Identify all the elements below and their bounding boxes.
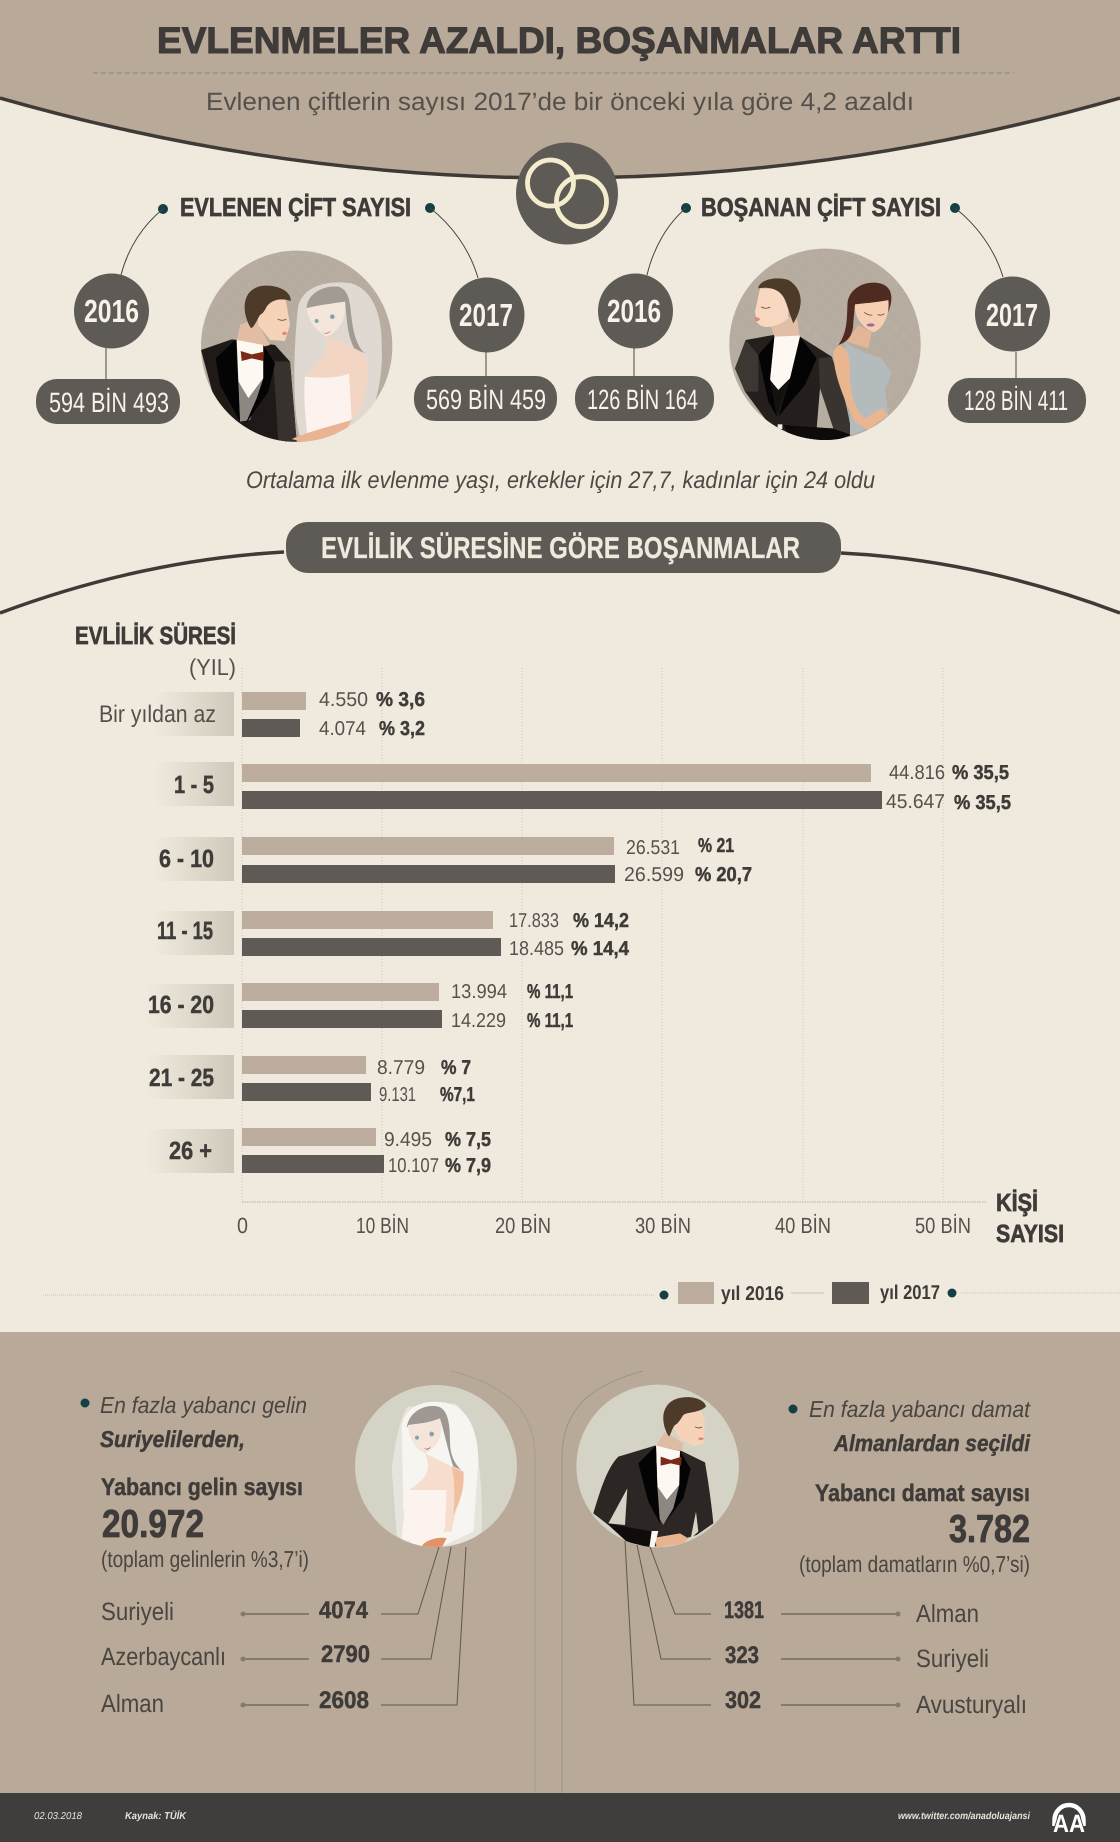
block: foreign brides text: 20.972 — [102, 1503, 204, 1546]
list: foreign brides by nationality — [101, 1547, 466, 1718]
row: 16-20: % 11,1 — [527, 981, 573, 1003]
block: foreign grooms text: En fazla yabancı damat — [809, 1396, 1031, 1422]
value: 569 bin 459 — [414, 376, 557, 421]
icon: wedding rings — [516, 142, 618, 244]
row: 1-5: % 35,5 — [952, 762, 1009, 784]
footer — [0, 1793, 1120, 1842]
value: 126 bin 164: 126 BİN 164 — [587, 384, 698, 415]
value: 569 bin 459: 569 BİN 459 — [426, 384, 546, 415]
illustration: foreign groom — [576, 1385, 739, 1548]
row: 6-10: % 20,7 — [695, 864, 752, 886]
row: 26+: % 7,5 — [445, 1129, 491, 1151]
row: under one year: Bir yıldan az — [99, 701, 216, 728]
row: 1-5: 1 - 5 — [174, 771, 214, 799]
value: 126 bin 164 — [575, 376, 714, 421]
block: foreign brides text: En fazla yabancı gelin — [100, 1392, 307, 1418]
subtitle: Evlenen çiftlerin sayısı 2017’de bir önceki yıla göre 4,2 azaldı — [206, 88, 914, 116]
row: 26+ — [146, 1128, 491, 1177]
block: foreign grooms text: (toplam damatların %0,7’si) — [799, 1551, 1030, 1577]
x axis labels — [237, 1213, 971, 1238]
badge: 2016 — [598, 274, 673, 348]
row: 6-10: % 21 — [698, 835, 734, 857]
badge: 2017 — [450, 278, 524, 352]
legend: yıl 2017 — [880, 1282, 940, 1304]
x axis labels: 50 BİN — [915, 1213, 971, 1238]
illustration: separated couple — [729, 249, 921, 443]
row: 16-20 — [146, 981, 573, 1032]
list: foreign brides by nationality: 2608 — [319, 1687, 369, 1714]
row: 21-25 — [146, 1055, 475, 1106]
row: under one year: 4.550 — [319, 689, 368, 711]
section heading pill: EVLİLİK SÜRESİNE GÖRE BOŞANMALAR — [321, 532, 800, 565]
x axis title — [996, 1189, 1064, 1248]
row: 11-15: % 14,2 — [573, 910, 629, 932]
section arc — [0, 552, 1120, 613]
row: under one year — [99, 689, 425, 740]
row: 1-5: 45.647 — [886, 791, 945, 813]
panel: foreign spouses — [0, 1332, 1120, 1793]
block: foreign grooms text: Almanlardan seçildi — [833, 1430, 1031, 1456]
row: 26+: 9.495 — [384, 1129, 432, 1151]
badge: 2017: 2017 — [459, 297, 513, 333]
row: under one year: % 3,6 — [376, 689, 425, 711]
axis title: marriage duration — [75, 622, 236, 680]
header curve — [0, 98, 1120, 178]
title: EVLENMELER AZALDI, BOŞANMALAR ARTTI — [157, 20, 961, 61]
value: 128 bin 411: 128 BİN 411 — [964, 385, 1068, 416]
list: foreign grooms by nationality: 323 — [725, 1642, 759, 1669]
row: 11-15: 17.833 — [509, 910, 559, 932]
badge: 2016: 2016 — [84, 293, 139, 329]
list: foreign brides by nationality: Alman — [101, 1690, 164, 1718]
panel: divorces — [575, 192, 1086, 423]
row: 21-25: % 7 — [441, 1057, 471, 1079]
block: foreign brides text: Yabancı gelin sayısı — [101, 1474, 303, 1501]
row: 6-10: 26.599 — [624, 864, 684, 886]
value: 594 bin 493: 594 BİN 493 — [49, 387, 169, 418]
row: 1-5 — [154, 762, 1011, 814]
row: 6-10 — [154, 835, 752, 886]
bar chart — [75, 622, 1064, 1248]
row: 21-25: 8.779 — [377, 1057, 425, 1079]
axis title: marriage duration: EVLİLİK SÜRESİ — [75, 622, 236, 650]
value: 128 bin 411 — [948, 378, 1086, 423]
row: 16-20: % 11,1 — [527, 1010, 573, 1032]
block: foreign brides text — [80, 1392, 309, 1572]
block: foreign grooms text — [788, 1396, 1031, 1577]
list: foreign grooms by nationality: Alman — [916, 1600, 979, 1628]
row: under one year: % 3,2 — [379, 718, 425, 740]
badge: 2017 — [975, 276, 1050, 352]
row: 21-25: %7,1 — [440, 1084, 475, 1106]
row: 21-25: 9.131 — [379, 1084, 416, 1106]
x axis labels: 10 BİN — [356, 1213, 409, 1238]
badge: 2016: 2016 — [607, 293, 661, 329]
list: foreign grooms by nationality — [625, 1541, 1027, 1719]
list: foreign grooms by nationality: Suriyeli — [916, 1645, 989, 1673]
list: foreign grooms by nationality: Avusturyalı — [916, 1691, 1027, 1719]
row: 26+: 10.107 — [388, 1155, 439, 1177]
block: foreign brides text: (toplam gelinlerin %3,7’i) — [101, 1546, 309, 1572]
illustration: bride and groom — [201, 251, 392, 443]
list: foreign brides by nationality: 2790 — [321, 1641, 370, 1668]
row: 6-10: 26.531 — [626, 837, 680, 859]
footer link: www.twitter.com/anadoluajansi — [898, 1811, 1030, 1822]
block: foreign grooms text: 3.782 — [949, 1508, 1030, 1551]
badge: 2017: 2017 — [986, 297, 1038, 333]
row: under one year: 4.074 — [319, 718, 366, 740]
row: 1-5: 44.816 — [889, 762, 945, 784]
list: foreign brides by nationality: Suriyeli — [101, 1598, 174, 1626]
footer date: 02.03.2018 — [34, 1811, 82, 1822]
header band — [0, 0, 1120, 178]
heading: divorced couples: BOŞANAN ÇİFT SAYISI — [701, 192, 941, 222]
row: 11-15 — [154, 910, 630, 960]
row: 11-15: % 14,4 — [571, 938, 630, 960]
legend — [43, 1282, 1120, 1305]
badge: 2016 — [74, 274, 149, 348]
section heading pill — [286, 522, 841, 573]
illustration: foreign bride — [355, 1385, 517, 1548]
note: first marriage age: Ortalama ilk evlenme yaşı, erkekler için 27,7, kadınlar için 24 oldu — [246, 467, 875, 494]
legend: yıl 2016 — [721, 1283, 784, 1305]
x axis labels: 20 BİN — [495, 1213, 551, 1238]
block: foreign grooms text: Yabancı damat sayısı — [815, 1480, 1030, 1507]
x axis labels: 30 BİN — [635, 1213, 691, 1238]
row: 16-20: 13.994 — [451, 981, 507, 1003]
row: 11-15: 11 - 15 — [157, 917, 213, 945]
row: 1-5: % 35,5 — [954, 792, 1011, 814]
list: foreign grooms by nationality: 302 — [725, 1687, 761, 1714]
list: foreign brides by nationality: Azerbaycanlı — [101, 1643, 226, 1671]
value: 594 bin 493 — [36, 379, 180, 424]
row: 11-15: 18.485 — [509, 938, 564, 960]
row: 26+: 26 + — [169, 1137, 212, 1165]
list: foreign brides by nationality: 4074 — [319, 1597, 369, 1624]
row: 16-20: 14.229 — [451, 1010, 506, 1032]
x axis labels: 0 — [237, 1213, 248, 1238]
x axis title: SAYISI — [996, 1220, 1064, 1248]
row: 6-10: 6 - 10 — [159, 845, 214, 873]
row: 21-25: 21 - 25 — [149, 1064, 214, 1092]
heading: married couples: EVLENEN ÇİFT SAYISI — [180, 192, 411, 222]
x axis labels: 40 BİN — [775, 1213, 831, 1238]
panel: marriages — [36, 192, 557, 424]
row: 26+: % 7,9 — [445, 1155, 491, 1177]
axis title: marriage duration: (YIL) — [189, 654, 236, 680]
icon: agency logo: AA — [1053, 1810, 1085, 1838]
x axis title: KİŞİ — [996, 1189, 1038, 1217]
block: foreign brides text: Suriyelilerden, — [100, 1426, 245, 1452]
row: 16-20: 16 - 20 — [148, 991, 214, 1019]
footer source: Kaynak: TÜİK — [125, 1810, 187, 1822]
list: foreign grooms by nationality: 1381 — [724, 1597, 764, 1624]
